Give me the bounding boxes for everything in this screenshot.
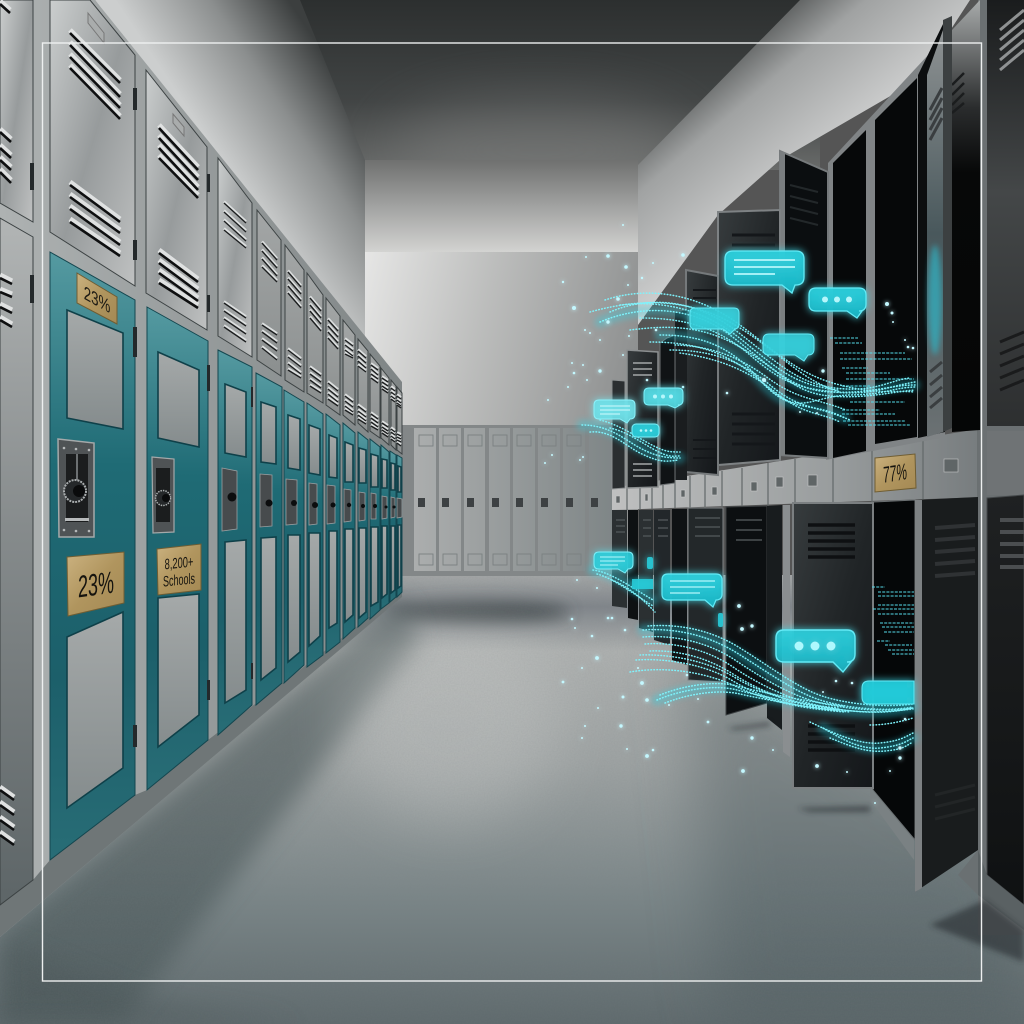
door handles and combination locks xyxy=(58,439,402,537)
data stream: upper particle waves xyxy=(582,293,915,461)
column vents xyxy=(952,73,964,113)
room: back wall xyxy=(365,252,638,582)
room: right wall xyxy=(638,0,970,325)
chat bubble: dots, smallest xyxy=(632,424,659,437)
open compartment interiors xyxy=(833,78,917,458)
chat bubble: dots, far xyxy=(644,388,683,408)
floor shadows xyxy=(727,722,1024,962)
glowing sparkles xyxy=(544,224,914,804)
plaque: 77%: 77% xyxy=(883,458,907,488)
plaque: 8,200+ Schools: Schools xyxy=(163,570,195,590)
chat bubbles xyxy=(594,251,914,704)
left locker row xyxy=(0,0,402,937)
chat bubble: partial fragments xyxy=(632,557,723,627)
locker base strip xyxy=(0,592,402,937)
upper closed-side doors xyxy=(612,210,780,489)
chat bubble: dots, large lower xyxy=(776,630,855,672)
plaque: 23% upper: 23% xyxy=(84,281,110,318)
plaque: 23% lower: 23% xyxy=(78,566,114,605)
digital code lines xyxy=(830,338,914,654)
data stream: lower particle waves xyxy=(593,570,913,751)
right locker row: upper and lower open lockers xyxy=(612,0,1024,962)
teal lower doors xyxy=(50,252,402,860)
room: left wall xyxy=(95,0,402,382)
chat bubble: text lines, lower middle xyxy=(662,574,722,607)
name tags on upper doors xyxy=(88,13,184,136)
room: concrete floor xyxy=(0,575,1024,1024)
room: ceiling xyxy=(280,0,820,252)
plaque: 8,200+ Schools: 8,200+ xyxy=(165,553,193,573)
lower far doors xyxy=(612,505,790,757)
lower large locker door xyxy=(793,503,873,788)
door vents xyxy=(0,1,401,845)
back row of grey lockers xyxy=(402,425,614,576)
hinges xyxy=(30,88,253,747)
grey upper doors xyxy=(0,0,402,905)
plaque: 77% xyxy=(875,454,916,492)
lower open compartment xyxy=(870,500,915,860)
frosted door windows xyxy=(67,310,401,808)
grey drawer band xyxy=(612,428,1024,510)
chat bubble: text lines, far xyxy=(594,400,635,423)
plaque: 23% lower xyxy=(67,552,124,616)
plaque: 8,200+ Schools xyxy=(157,544,201,595)
chat bubble: text lines, large xyxy=(725,251,804,293)
lower open door foreground xyxy=(915,497,978,895)
top frame edge of open compartments xyxy=(826,40,945,460)
chat bubble: dots, upper right xyxy=(809,288,866,318)
chat bubble: cropped at door xyxy=(862,681,914,704)
chat bubble: blank, middle right xyxy=(763,334,814,361)
dark locker column beside open door xyxy=(952,0,980,432)
chat bubble: text lines, lower far xyxy=(594,552,633,573)
thin open locker door xyxy=(918,16,952,438)
locker row frame xyxy=(0,0,402,937)
plaque: 23% upper xyxy=(77,273,117,324)
open locker door with dark interior xyxy=(780,151,828,458)
far right lockers xyxy=(978,0,1024,935)
chat bubble: blank, middle left xyxy=(690,308,739,334)
